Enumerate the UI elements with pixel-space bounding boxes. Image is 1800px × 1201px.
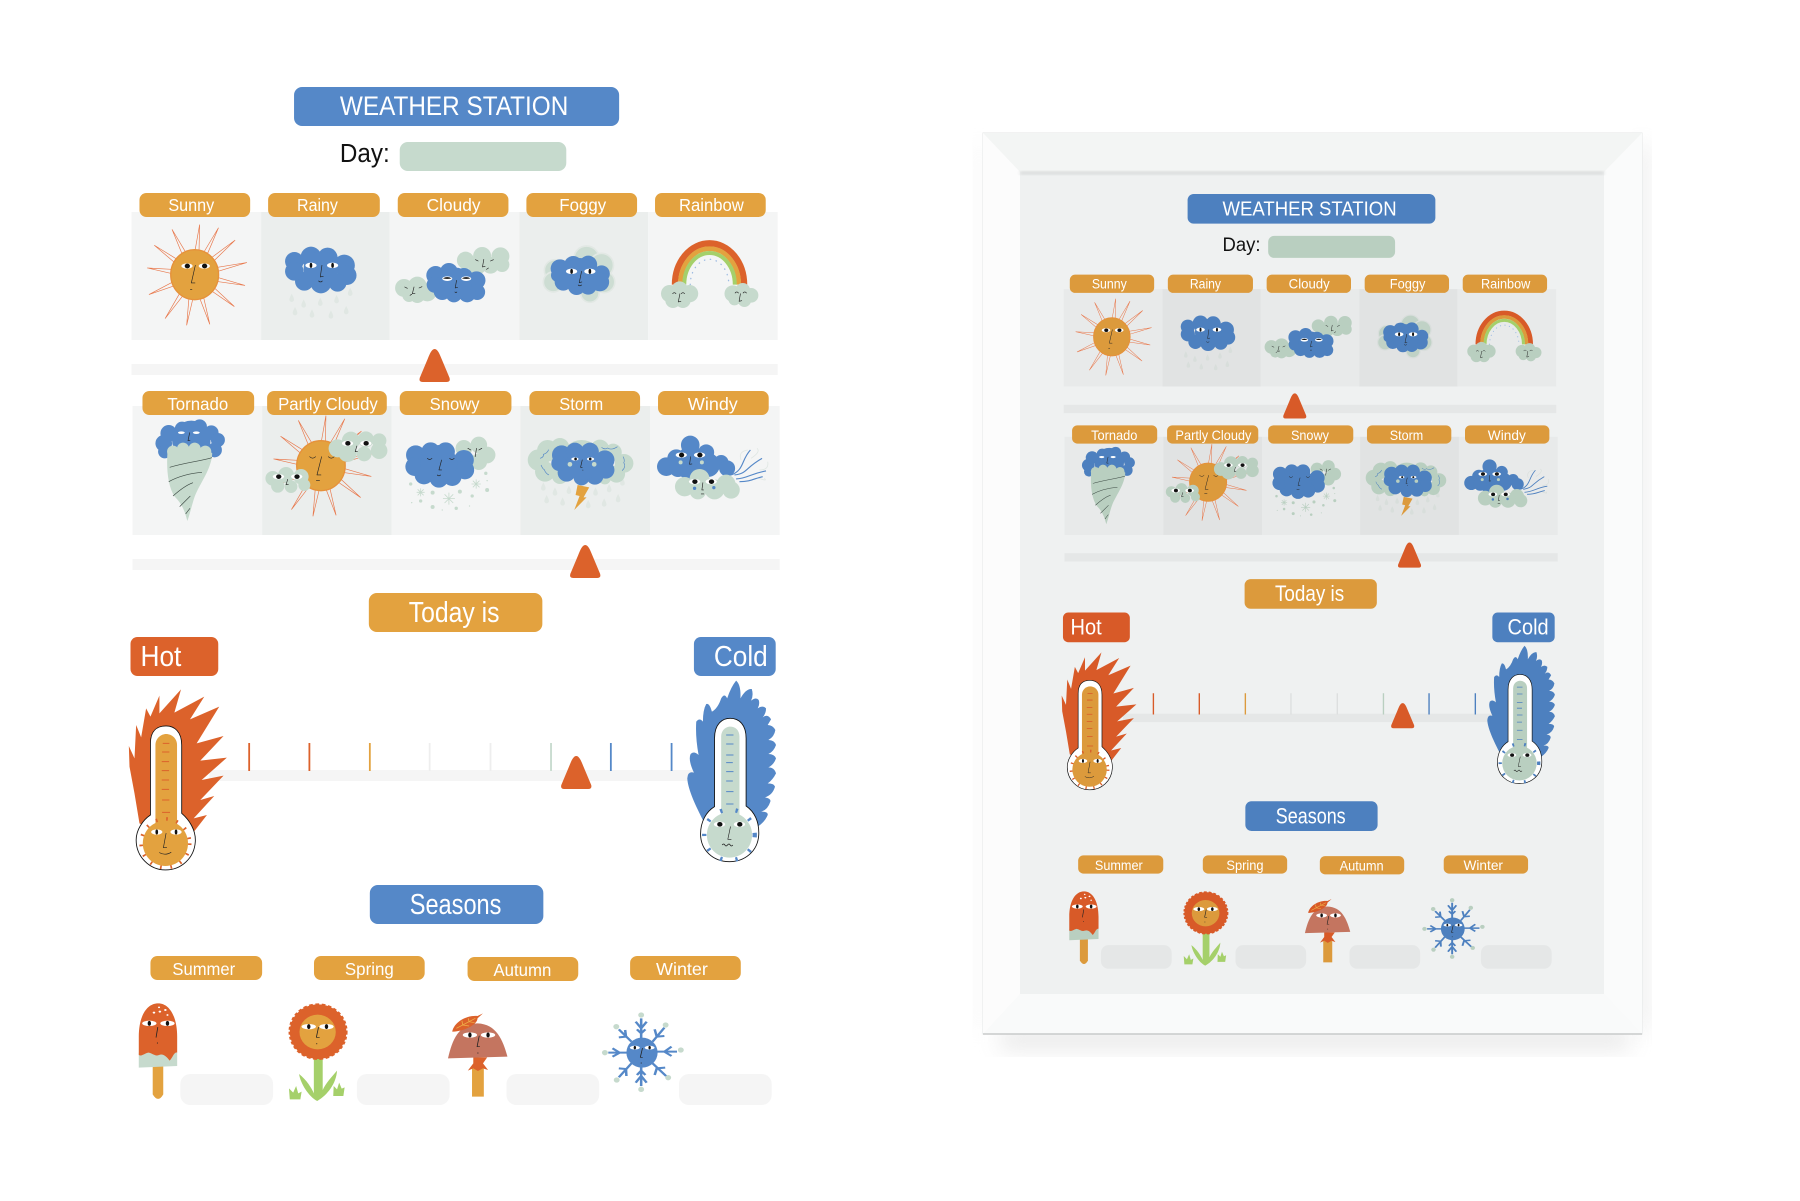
chip: Rainy: Rainy: [297, 195, 338, 215]
framed chip: Winter: Winter: [1463, 858, 1503, 873]
slider track one: [132, 364, 778, 375]
framed day input box: [1268, 236, 1395, 258]
heading: Today is: Today is: [409, 597, 499, 629]
label: Cold: [694, 637, 776, 676]
framed slider marker two: [1398, 543, 1421, 568]
framed heading: Today is: [1245, 579, 1377, 609]
framed panel: weather row one: [1064, 289, 1556, 387]
frame border: [983, 133, 1642, 1034]
framed heading: Seasons: Seasons: [1276, 803, 1346, 828]
chip: Winter: Winter: [656, 959, 708, 979]
framed icon: rainbow: [1467, 313, 1541, 362]
framed chip: Foggy: [1365, 275, 1449, 293]
chip: Spring: Spring: [345, 959, 394, 979]
framed icon: sun: [1076, 299, 1152, 376]
icon: storm cloud: [528, 438, 633, 510]
framed panel: weather row two: [1064, 437, 1558, 535]
framed icon: spring flower: [1184, 892, 1227, 966]
chip: Partly Cloudy: Partly Cloudy: [278, 394, 378, 414]
chip: Spring: [314, 956, 425, 980]
framed icon: hot thermometer: [1062, 652, 1136, 790]
label: Cold: Cold: [714, 641, 768, 673]
title: WEATHER STATION: [340, 91, 568, 121]
framed icon: cold thermometer: [1487, 646, 1555, 784]
chip: Tornado: Tornado: [167, 394, 228, 414]
framed chip: Sunny: [1070, 275, 1154, 293]
poster mat: [1020, 171, 1604, 994]
framed icon: tornado: [1082, 447, 1135, 524]
icon: rain cloud: [285, 247, 357, 319]
chip: Foggy: Foggy: [559, 195, 606, 215]
icon: snow cloud: [405, 437, 495, 511]
day label: Day:: [340, 138, 390, 168]
panel: weather row one: [132, 212, 778, 340]
framed chip: Rainy: [1168, 275, 1253, 293]
chip: Rainbow: Rainbow: [679, 195, 745, 215]
slider marker one: [419, 349, 450, 382]
chip: Autumn: [468, 957, 578, 981]
framed chip: Tornado: Tornado: [1091, 428, 1138, 443]
icon: cold thermometer: [687, 681, 776, 862]
chip: Snowy: [400, 391, 511, 415]
framed answer boxes for seasons: [1101, 945, 1552, 969]
framed icon: partly cloudy: [1166, 444, 1259, 521]
framed chip: Rainbow: Rainbow: [1481, 276, 1530, 291]
framed icon: storm cloud: [1366, 461, 1446, 516]
icon: rainbow: [661, 243, 758, 308]
framed temperature track and ticks: [1123, 693, 1495, 722]
framed chip: Windy: Windy: [1488, 428, 1526, 443]
chip: Winter: [630, 956, 741, 980]
framed slider track one: [1064, 405, 1556, 413]
chip: Storm: Storm: [559, 394, 603, 414]
framed chip: Rainy: Rainy: [1190, 276, 1221, 291]
icon: hot thermometer: [129, 689, 227, 870]
label: Hot: Hot: [140, 641, 181, 673]
icon: windy clouds: [657, 436, 768, 499]
icon: fog cloud: [543, 246, 615, 302]
icon: partly cloudy: [265, 415, 387, 517]
framed temperature marker: [1391, 703, 1414, 728]
chip: Foggy: [526, 193, 637, 217]
chip: Summer: [150, 956, 262, 980]
framed chip: Spring: [1203, 855, 1287, 874]
framed heading: Today is: Today is: [1275, 581, 1344, 606]
framed day label: Day:: [1223, 234, 1261, 256]
framed icon: rain cloud: [1181, 316, 1235, 370]
temperature track and ticks: [209, 743, 698, 781]
slider track two: [132, 559, 780, 570]
framed title: [1188, 194, 1435, 224]
icon: clouds: [395, 247, 509, 303]
framed chip: Cloudy: [1267, 275, 1351, 293]
slider marker two: [570, 545, 600, 578]
framed icon: clouds: [1265, 316, 1352, 358]
icon: sun: [147, 224, 247, 326]
heading: Today is: [369, 593, 542, 632]
chip: Cloudy: Cloudy: [427, 195, 481, 215]
framed heading: Seasons: [1245, 801, 1378, 831]
framed chip: Partly Cloudy: Partly Cloudy: [1175, 428, 1252, 443]
framed chip: Windy: [1465, 425, 1549, 444]
temperature marker: [561, 756, 591, 789]
frame shadow: [975, 145, 1648, 1050]
framed chip: Autumn: Autumn: [1340, 859, 1384, 874]
framed label: Hot: [1063, 613, 1130, 642]
chip: Sunny: Sunny: [168, 195, 214, 215]
framed icon: snow cloud: [1272, 460, 1341, 516]
framed chip: Snowy: [1268, 425, 1353, 444]
framed chip: Spring: Spring: [1226, 858, 1264, 873]
icon: tornado: [155, 419, 225, 521]
framed chip: Foggy: Foggy: [1390, 276, 1426, 291]
chip: Rainbow: [655, 193, 766, 217]
framed chip: Tornado: [1072, 425, 1157, 444]
framed poster mockup: [975, 133, 1648, 1050]
title: [294, 87, 619, 126]
framed chip: Cloudy: Cloudy: [1289, 276, 1330, 291]
framed chip: Winter: [1444, 855, 1528, 874]
icon: autumn mushroom: [448, 1013, 507, 1097]
framed slider marker one: [1283, 393, 1306, 419]
framed chip: Summer: [1078, 855, 1163, 874]
framed icon: winter snowflake: [1422, 898, 1485, 959]
framed chip: Storm: Storm: [1390, 428, 1423, 443]
day input box: [400, 142, 566, 171]
framed chip: Snowy: Snowy: [1291, 428, 1329, 443]
icon: spring flower: [289, 1004, 346, 1101]
framed slider track two: [1064, 553, 1558, 562]
poster: framed weather station artwork: [1062, 194, 1558, 969]
chip: Windy: [658, 391, 769, 415]
framed icon: windy clouds: [1464, 459, 1549, 508]
chip: Tornado: [142, 391, 254, 415]
chip: Summer: Summer: [172, 959, 235, 979]
icon: winter snowflake: [602, 1012, 684, 1092]
chip: Rainy: [268, 193, 380, 217]
panel: weather row two: [132, 406, 780, 535]
label: Hot: [131, 637, 218, 676]
chip: Autumn: Autumn: [493, 960, 551, 980]
framed icon: summer popsicle: [1069, 891, 1099, 964]
framed label: Cold: Cold: [1508, 615, 1549, 640]
icon: summer popsicle: [139, 1003, 177, 1099]
framed icon: fog cloud: [1378, 315, 1432, 358]
framed label: Cold: [1492, 613, 1555, 642]
framed label: Hot: Hot: [1071, 615, 1102, 640]
chip: Snowy: Snowy: [430, 394, 480, 414]
framed icon: autumn mushroom: [1305, 899, 1350, 962]
framed chip: Autumn: [1320, 856, 1404, 874]
chip: Sunny: [139, 193, 250, 217]
heading: Seasons: Seasons: [410, 889, 501, 921]
framed chip: Summer: Summer: [1095, 858, 1143, 873]
framed chip: Storm: [1367, 425, 1451, 444]
framed chip: Sunny: Sunny: [1092, 276, 1127, 291]
heading: Seasons: [370, 885, 543, 924]
framed chip: Rainbow: [1463, 275, 1547, 293]
chip: Storm: [529, 391, 640, 415]
chip: Windy: Windy: [688, 394, 738, 414]
framed title: WEATHER STATION: [1223, 197, 1397, 220]
poster: weather station flat artwork: [129, 87, 780, 1105]
answer boxes for seasons: [180, 1074, 772, 1105]
chip: Cloudy: [398, 193, 508, 217]
